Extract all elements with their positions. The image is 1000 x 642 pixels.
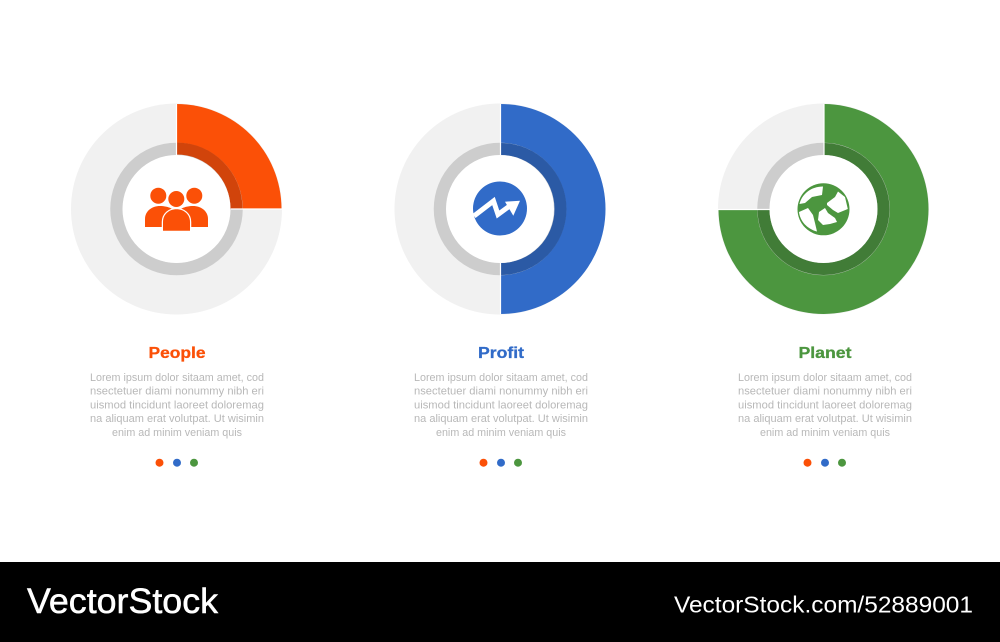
heading: Profit: Profit — [478, 345, 524, 362]
icon: growth arrow — [473, 182, 527, 236]
text block: people description: na aliquam erat volutpat. Ut wisimin — [90, 413, 264, 425]
text block: profit description: nsectetuer diami nonummy nibh eri — [414, 386, 588, 398]
pagination dots — [156, 459, 198, 467]
donut chart: people 25% — [71, 104, 282, 314]
text block: profit description: na aliquam erat volutpat. Ut wisimin — [414, 413, 588, 425]
text block: profit description — [414, 372, 588, 439]
footer bar — [0, 562, 1000, 642]
text block: planet description — [738, 372, 912, 439]
text block: planet description: Lorem ipsum dolor sitaam amet, cod — [738, 372, 912, 384]
text block: people description: uismod tincidunt laoreet doloremag — [90, 399, 264, 411]
pagination dots — [480, 459, 522, 467]
heading: People: People — [148, 345, 206, 362]
icon: people group — [145, 188, 208, 231]
pagination dots — [804, 459, 846, 467]
text block: people description: enim ad minim veniam quis — [112, 427, 242, 439]
text block: people description: Lorem ipsum dolor sitaam amet, cod — [90, 372, 264, 384]
icon: globe — [798, 183, 850, 235]
panel: people — [71, 104, 282, 467]
text block: people description — [90, 372, 264, 439]
text block: planet description: na aliquam erat volutpat. Ut wisimin — [738, 413, 912, 425]
panel: profit — [394, 104, 606, 467]
text block: planet description: enim ad minim veniam quis — [760, 427, 890, 439]
footer URL: VectorStock.com/52889001 — [674, 592, 973, 618]
donut chart: planet 75% — [718, 104, 929, 314]
text block: planet description: uismod tincidunt laoreet doloremag — [738, 399, 912, 411]
text block: planet description: nsectetuer diami nonummy nibh eri — [738, 386, 912, 398]
text block: profit description: Lorem ipsum dolor sitaam amet, cod — [414, 372, 588, 384]
donut chart: profit 50% — [394, 104, 606, 314]
footer brand: VectorStock — [27, 582, 219, 621]
text block: people description: nsectetuer diami nonummy nibh eri — [90, 386, 264, 398]
text block: profit description: enim ad minim veniam quis — [436, 427, 566, 439]
panel: planet — [718, 104, 929, 467]
heading: Planet: Planet — [798, 345, 852, 362]
text block: profit description: uismod tincidunt laoreet doloremag — [414, 399, 588, 411]
